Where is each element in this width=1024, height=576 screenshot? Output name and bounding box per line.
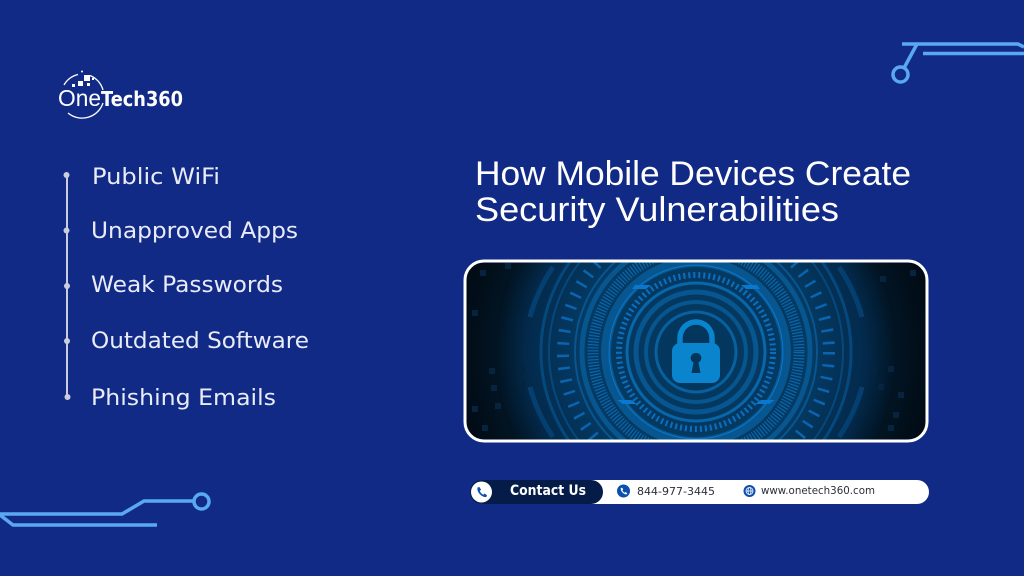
dots [472, 263, 916, 431]
icon: phone white circle [471, 482, 492, 502]
title [475, 155, 911, 229]
circuit decoration: bottom left [0, 494, 209, 525]
website: www.onetech360.com [761, 485, 875, 497]
contact us label: Contact Us [510, 483, 586, 499]
logo ring [64, 74, 103, 118]
logo: OneTech360 [58, 70, 183, 118]
circuit decoration: top right [893, 44, 1024, 82]
padlock icon [672, 322, 720, 383]
logo wordmark: Tech360: Tech360 [101, 87, 183, 111]
timeline line [64, 172, 70, 400]
item: Weak Passwords: Weak Passwords [91, 273, 283, 298]
item: Public WiFi: Public WiFi [92, 165, 220, 190]
phone number: 844-977-3445 [637, 485, 715, 498]
logo wordmark: One: One [58, 85, 101, 111]
item: Outdated Software: Outdated Software [91, 329, 309, 354]
title: Security Vulnerabilities [475, 191, 839, 229]
item: Unapproved Apps: Unapproved Apps [91, 219, 298, 244]
contact us pill [470, 480, 603, 504]
logo pixels [72, 70, 94, 87]
list of vulnerabilities [91, 165, 309, 411]
icon: globe [744, 485, 756, 497]
concentric rings [528, 262, 864, 440]
panel: padlock image [464, 260, 928, 442]
contact bar [470, 480, 929, 504]
icon: phone [617, 484, 630, 498]
title: How Mobile Devices Create [475, 155, 911, 193]
item: Phishing Emails: Phishing Emails [91, 386, 276, 411]
